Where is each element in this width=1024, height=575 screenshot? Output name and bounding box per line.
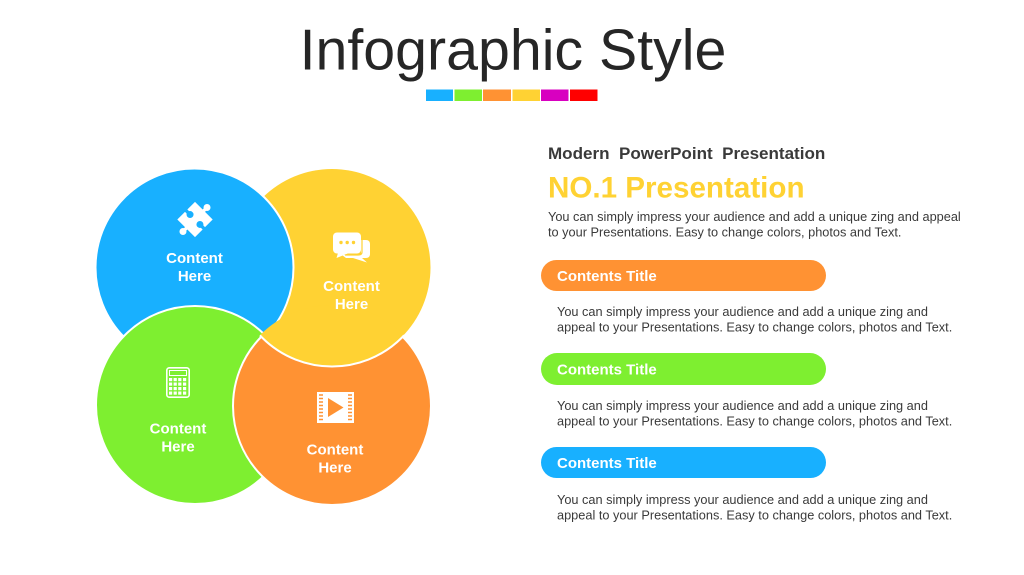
pill: green xyxy=(541,353,826,385)
label: yellow: Here xyxy=(335,296,368,313)
intro text: to your Presentations. Easy to change colors, photos and Text. xyxy=(548,224,901,240)
heading: NO.1 Presentation: NO.1 Presentation xyxy=(548,172,805,204)
item text: You can simply impress your audience and add a unique zing and xyxy=(557,304,928,319)
pill title: Contents Title xyxy=(557,362,657,378)
icon: puzzle piece xyxy=(171,196,219,243)
colour bar xyxy=(426,90,598,101)
label: blue: Here xyxy=(178,268,211,285)
title: Infographic Style xyxy=(300,18,726,82)
icon: calculator xyxy=(167,368,189,397)
subtitle: Modern PowerPoint Presentation xyxy=(548,144,825,163)
item 2 xyxy=(541,353,952,428)
label: orange: Here xyxy=(318,460,352,476)
intro text: You can simply impress your audience and add a unique zing and appeal xyxy=(548,209,961,224)
venn diagram xyxy=(96,168,431,505)
pill: orange xyxy=(541,260,826,291)
label: orange: Content xyxy=(307,442,363,458)
circle: green xyxy=(96,306,294,504)
item 1 xyxy=(541,260,952,334)
icon: speech bubbles xyxy=(333,232,370,262)
pill: blue xyxy=(541,447,826,478)
label: green: Here xyxy=(161,438,195,456)
item text: appeal to your Presentations. Easy to change colors, photos and Text. xyxy=(557,508,952,522)
circle: blue xyxy=(96,168,294,366)
pill title: Contents Title xyxy=(557,455,657,472)
item text: appeal to your Presentations. Easy to change colors, photos and Text. xyxy=(557,320,952,334)
circle: yellow overlap on orange xyxy=(259,306,404,368)
item text: You can simply impress your audience and add a unique zing and xyxy=(557,492,928,507)
label: blue: Content xyxy=(166,250,223,267)
item text: appeal to your Presentations. Easy to change colors, photos and Text. xyxy=(557,414,952,428)
item 3 xyxy=(541,447,952,522)
label: yellow: Content xyxy=(323,278,380,295)
circle: orange xyxy=(233,307,431,505)
icon: film strip with play xyxy=(317,392,354,423)
pill title: Contents Title xyxy=(557,268,657,285)
circle: yellow xyxy=(234,169,430,366)
label: green: Content xyxy=(150,420,206,438)
item text: You can simply impress your audience and add a unique zing and xyxy=(557,398,928,413)
